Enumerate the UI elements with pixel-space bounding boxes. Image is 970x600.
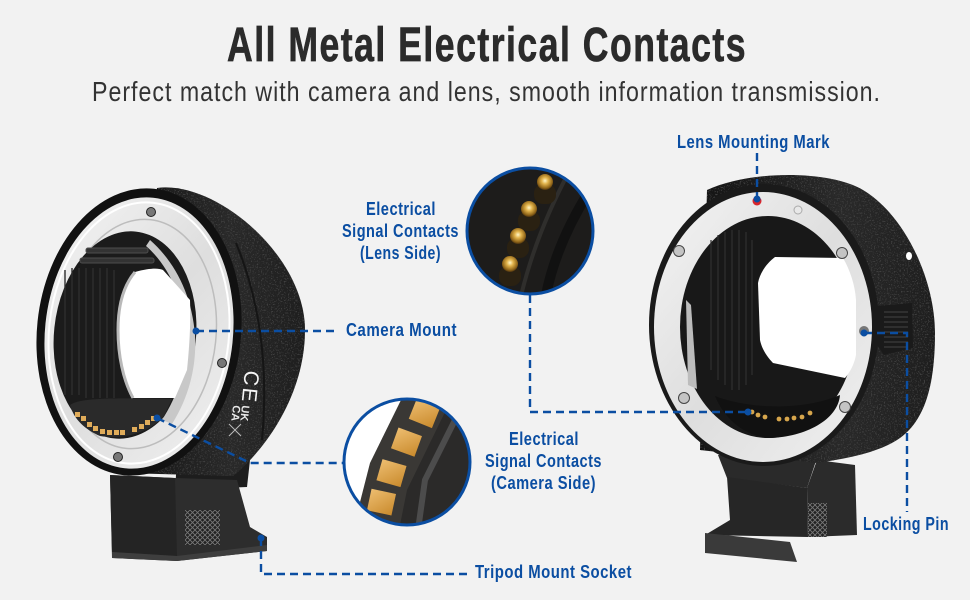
callout: camera mount <box>192 320 457 340</box>
left adapter: camera side: CE <box>237 369 263 405</box>
callout: electrical signal contacts camera side: Signal Contacts <box>485 451 602 471</box>
callout: lens mounting mark: Lens Mounting Mark <box>677 132 830 152</box>
callout: electrical signal contacts camera side <box>154 414 602 493</box>
callout: locking pin: Locking Pin <box>863 514 949 534</box>
left adapter: camera side: CA <box>228 405 242 422</box>
right adapter: lens side <box>649 175 935 562</box>
inset: camera side contacts <box>344 398 480 530</box>
callout: tripod mount socket: Tripod Mount Socket <box>475 562 632 582</box>
locking lever <box>877 303 913 355</box>
callout: lens mounting mark <box>677 132 830 202</box>
callout: electrical signal contacts lens side: Electrical <box>366 199 436 219</box>
upper slots <box>80 248 154 263</box>
left adapter: camera side: UK <box>237 405 251 422</box>
left adapter: camera side <box>23 178 305 561</box>
callout: electrical signal contacts camera side: Electrical <box>509 429 579 449</box>
inset: lens side contacts <box>467 168 593 300</box>
callout: locking pin <box>860 330 949 534</box>
callout: electrical signal contacts lens side <box>342 199 752 416</box>
callout: tripod mount socket <box>258 534 632 582</box>
title: All Metal Electrical Contacts <box>227 19 747 72</box>
callout: electrical signal contacts camera side: (Camera Side) <box>491 473 596 493</box>
callout: electrical signal contacts lens side: Signal Contacts <box>342 221 459 241</box>
callout: camera mount: Camera Mount <box>346 320 457 340</box>
callout: electrical signal contacts lens side: (Lens Side) <box>360 243 441 263</box>
